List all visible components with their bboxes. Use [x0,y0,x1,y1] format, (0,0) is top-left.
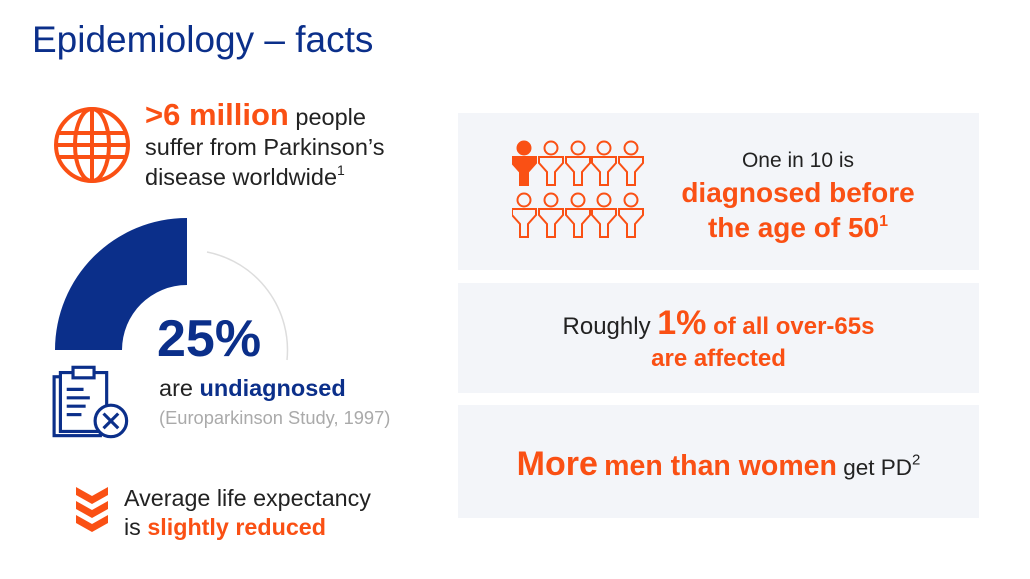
text: life expectancy: Average life expectancy [124,485,371,511]
text: 6 million: suffer from Parkinson’s [145,134,384,160]
text: undiagnosed: (Europarkinson Study, 1997) [159,407,390,428]
text: life expectancy [124,485,371,540]
text: diagnosed before 50: diagnosed before [681,177,915,208]
text: undiagnosed [159,375,390,428]
icon: globe [54,107,130,183]
icon: chevrons down [76,487,108,532]
text: more men than women: More men than women get PD2 [517,445,920,483]
text: roughly 1%: are affected [651,345,786,372]
icon: clipboard [52,366,128,438]
panel: 1% [458,283,979,393]
icon: people grid [512,140,644,238]
text: life expectancy: is slightly reduced [124,514,326,540]
panel: one in 10 [458,113,979,270]
text: diagnosed before 50: One in 10 is [742,149,854,172]
text: 6 million [145,97,384,190]
title: Epidemiology – facts [32,19,373,60]
text: 6 million: >6 million people [145,97,366,132]
text: diagnosed before 50: the age of 501 [708,212,888,243]
text: roughly 1%: Roughly 1% of all over-65s [563,304,874,342]
text: roughly 1% [563,304,874,372]
chart: undiagnosed quarter arc [55,218,288,360]
big number: 25% [157,310,261,368]
text: diagnosed before 50 [681,149,915,243]
text: 6 million: disease worldwide1 [145,162,345,190]
text: undiagnosed: are undiagnosed [159,375,346,401]
panel: more men [458,405,979,518]
